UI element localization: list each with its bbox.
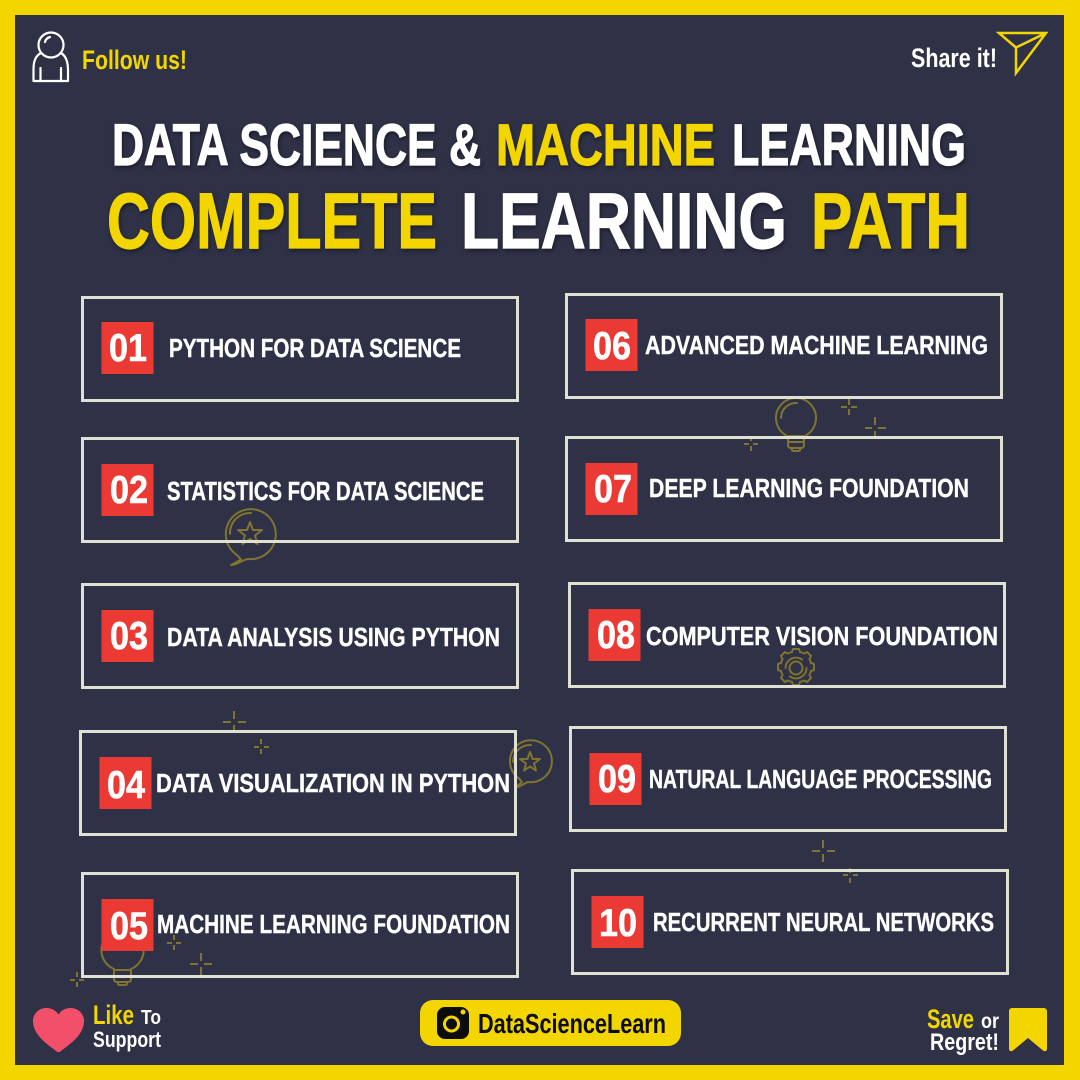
panel: item 07: 07 [594,468,632,511]
icon: follow user [34,32,68,81]
decoration: gear [778,649,814,685]
icon: instagram [437,1007,469,1039]
panel: item 04: 04 [107,764,145,807]
panel: item 05: 05 [110,905,148,948]
panel: item 02: STATISTICS FOR DATA SCIENCE [167,476,484,506]
panel: item 03: 03 [110,615,148,658]
like to support text: Like [93,1000,134,1030]
panel: item 03: DATA ANALYSIS USING PYTHON [167,622,500,652]
decoration: sparkles 3 [812,840,858,883]
decoration: chat star 2 [510,740,552,787]
like to support text: To [141,1007,161,1029]
title line 2: LEARNING [461,176,787,265]
icon: paper plane [999,33,1046,73]
decoration: sparkles 2 [223,711,269,754]
panel: item 07: DEEP LEARNING FOUNDATION [649,473,969,503]
like to support text: Support [93,1027,162,1052]
panel: item 01: PYTHON FOR DATA SCIENCE [169,333,461,363]
share it label: Share it! [911,43,997,73]
panel: item 01 [82,298,518,400]
follow us label: Follow us! [82,45,187,75]
panel: item 05: MACHINE LEARNING FOUNDATION [157,909,510,939]
title line 2: COMPLETE [107,176,437,265]
decoration: bulb 2 and sparkles [70,935,212,987]
save or regret text: Save [927,1004,974,1034]
title line 1: LEARNING [732,113,966,178]
panel: item 09 [570,728,1006,830]
panel: item 10: 10 [599,902,637,945]
panel: item 06: ADVANCED MACHINE LEARNING [645,330,988,360]
panel: item 10: RECURRENT NEURAL NETWORKS [653,907,994,937]
title line 1: DATA SCIENCE & [112,113,481,178]
save or regret text: or [981,1010,999,1033]
instagram handle pill: DataScienceLearn [478,1008,666,1039]
title line 1: MACHINE [496,113,715,178]
decoration: bulb 1 [776,398,816,451]
save or regret text [927,1004,999,1056]
icon: heart [33,1008,84,1052]
decoration: chat star 1 [226,509,276,565]
panel: item 02: 02 [110,469,148,512]
decoration: sparkles 1 [744,399,886,451]
panel: item 08: COMPUTER VISION FOUNDATION [646,621,998,651]
panel: item 04: DATA VISUALIZATION IN PYTHON [156,768,510,798]
title line 1 [112,113,966,178]
title line 2 [107,176,970,265]
panel: item 08: 08 [597,614,635,657]
title line 2: PATH [811,176,970,265]
panel: item 09: 09 [598,758,636,801]
panel: item 08 [570,584,1004,686]
panel: item 06 [566,294,1002,398]
instagram handle pill [420,1000,681,1046]
like to support text [93,1000,162,1052]
save or regret text: Regret! [930,1029,999,1056]
panel: item 04 [80,732,516,834]
panel: item 05 [82,874,518,976]
panel: item 01: 01 [109,327,147,370]
panel: item 03 [82,584,518,688]
panel: item 10 [572,870,1008,974]
panel: item 07 [566,438,1002,540]
panel: item 06: 06 [593,325,631,368]
panel: item 02 [82,438,518,542]
icon: bookmark [1009,1008,1047,1051]
